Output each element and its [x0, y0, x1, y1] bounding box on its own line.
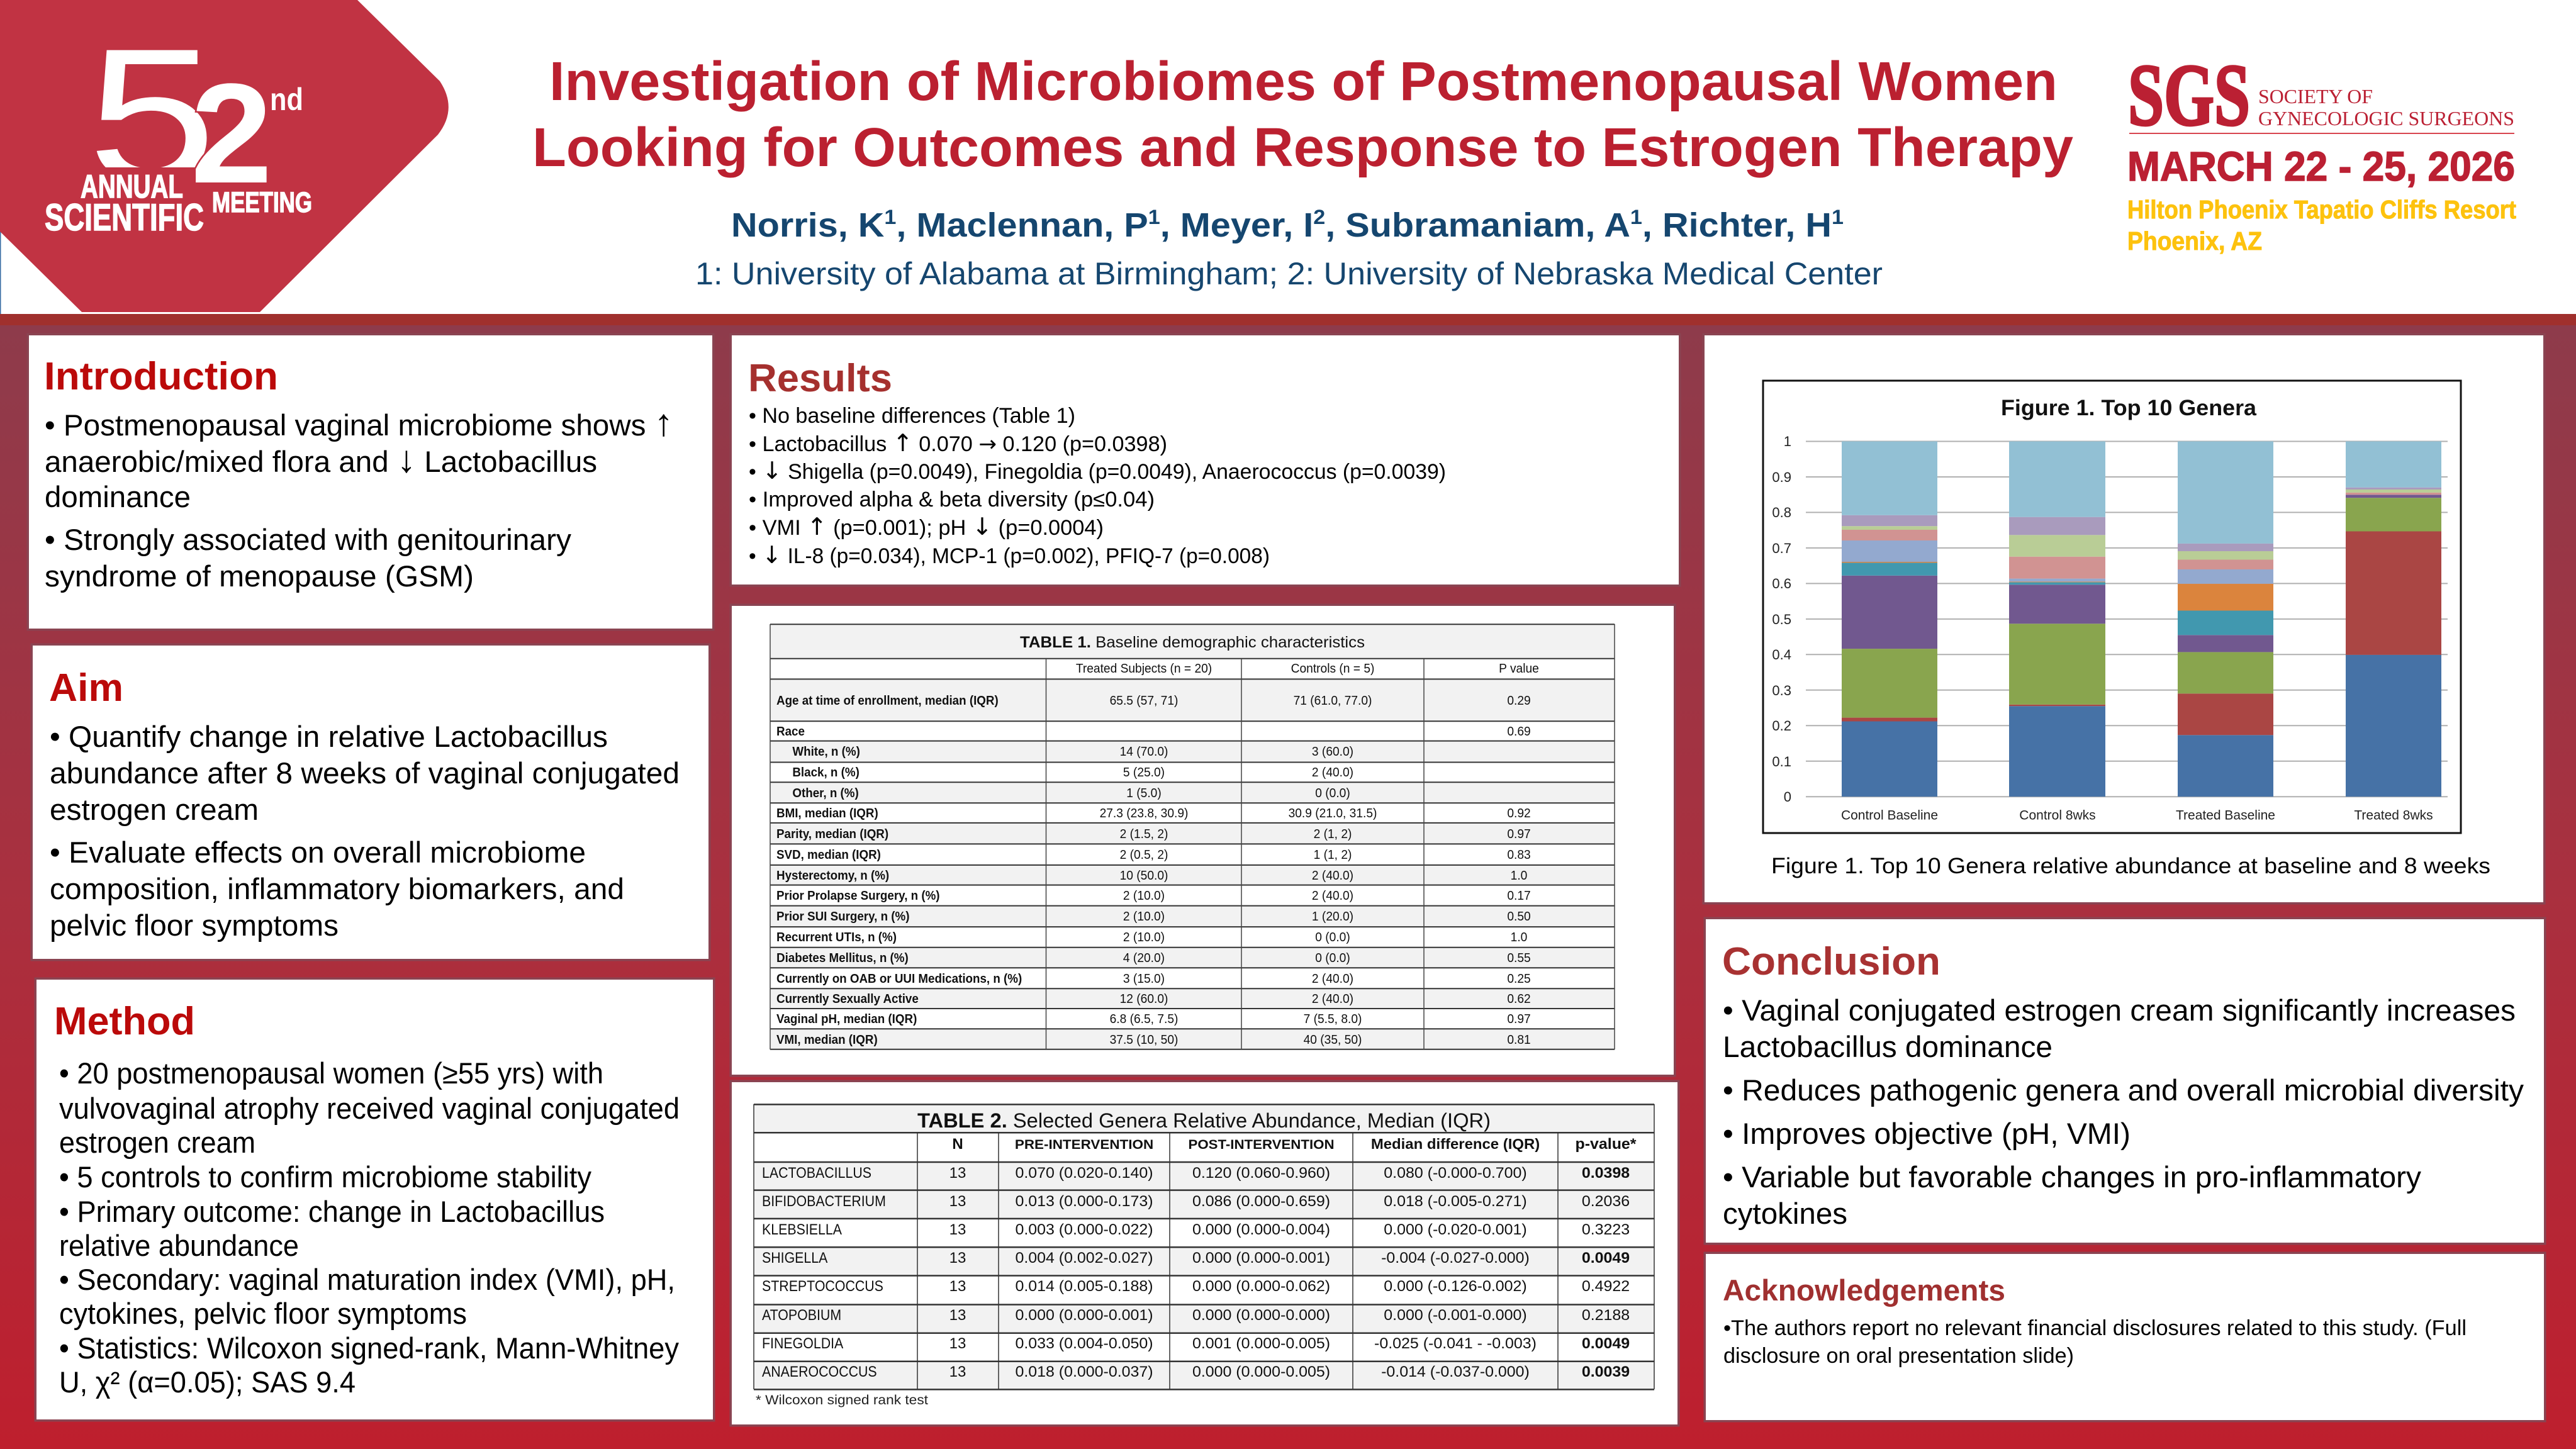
table 2 N column: 13: [949, 1250, 966, 1267]
figure caption: Figure 1. Top 10 Genera relative abundance at baseline and 8 weeks: [1771, 854, 2490, 878]
introduction text: syndrome of menopause (GSM): [45, 559, 474, 593]
y axis labels: 0.2: [1772, 718, 1791, 734]
table 2 pre-intervention column: 0.014 (0.005-0.188): [1015, 1278, 1153, 1295]
table 1 controls column: [1289, 662, 1377, 1047]
y axis labels: 0: [1784, 789, 1791, 805]
table 1 p value column: 0.17: [1507, 889, 1531, 903]
table 2 median difference column: Median difference (IQR): [1371, 1136, 1540, 1152]
method text: • Statistics: Wilcoxon signed-rank, Mann-Whitney: [59, 1331, 679, 1365]
table 1 controls column: 71 (61.0, 77.0): [1294, 694, 1372, 708]
city: Phoenix, AZ: [2127, 227, 2262, 255]
authors: , Maclennan, P: [896, 206, 1148, 244]
acknowledgements text: disclosure on oral presentation slide): [1723, 1344, 2074, 1368]
authors: 1: [1148, 206, 1160, 228]
table 2 pre-intervention column: [1015, 1136, 1153, 1380]
table 2 median difference column: 0.080 (-0.000-0.700): [1384, 1165, 1527, 1182]
table 2 post-intervention column: 0.120 (0.060-0.960): [1192, 1165, 1330, 1182]
table 1 p value column: 0.83: [1507, 848, 1531, 862]
results text: • No baseline differences (Table 1): [749, 404, 1075, 428]
method text: estrogen cream: [59, 1126, 255, 1159]
table 2 pre-intervention column: PRE-INTERVENTION: [1015, 1136, 1153, 1152]
table 2 N column: [949, 1136, 966, 1380]
authors: , Richter, H: [1642, 206, 1832, 244]
authors: 1: [1630, 206, 1642, 228]
heading: results: Results: [748, 357, 892, 400]
stacked bar chart: [1763, 381, 2461, 833]
table 2 genus labels: LACTOBACILLUS: [762, 1164, 871, 1181]
table 1 p value column: [1499, 662, 1539, 1047]
method text: U, χ² (α=0.05); SAS 9.4: [59, 1365, 356, 1399]
table 1 controls column: 1 (20.0): [1312, 910, 1353, 924]
table 2 p-value column: 0.2188: [1582, 1307, 1630, 1324]
table 2 post-intervention column: 0.000 (0.000-0.001): [1192, 1250, 1330, 1267]
results text: • ↓ IL-8 (p=0.034), MCP-1 (p=0.002), PFIQ-7 (p=0.008): [749, 541, 1270, 569]
table 2 genus labels: FINEGOLDIA: [762, 1334, 844, 1351]
table 1 controls column: 40 (35, 50): [1304, 1033, 1362, 1047]
title line 1: Investigation of Microbiomes of Postmenopausal Women: [549, 51, 2058, 112]
panel: figure 1: [1705, 335, 2543, 902]
heading: introduction: Introduction: [44, 355, 278, 398]
y axis labels: 0.5: [1772, 612, 1791, 627]
table 1 controls column: 0 (0.0): [1315, 786, 1350, 800]
heading: method: Method: [54, 1000, 195, 1043]
affiliations: 1: University of Alabama at Birmingham; 2: University of Nebraska Medical Center: [695, 256, 1883, 291]
table 2 N column: 13: [949, 1335, 966, 1352]
authors: 1: [884, 206, 896, 228]
y axis labels: 0.6: [1772, 576, 1791, 591]
table 1 treated column: 2 (10.0): [1123, 889, 1165, 903]
table 2 p-value column: [1575, 1136, 1637, 1380]
table 2 N column: 13: [949, 1165, 966, 1182]
panel: conclusion: [1706, 919, 2544, 1243]
table 1 controls column: 30.9 (21.0, 31.5): [1289, 807, 1377, 820]
table 1 row labels: Currently Sexually Active: [776, 992, 919, 1006]
table 2 footnote: * Wilcoxon signed rank test: [756, 1393, 928, 1407]
table 1 treated column: [1076, 662, 1212, 1047]
table 1 controls column: 7 (5.5, 8.0): [1304, 1012, 1362, 1026]
method text: vulvovaginal atrophy received vaginal conjugated: [59, 1092, 680, 1125]
table 1 controls column: 1 (1, 2): [1314, 848, 1352, 862]
table 1 p value column: 0.69: [1507, 725, 1531, 739]
logo numeral 2: 2: [191, 53, 272, 213]
table 1 controls column: 3 (60.0): [1312, 745, 1353, 759]
method text: • Primary outcome: change in Lactobacillus: [59, 1195, 605, 1228]
logo numeral 5: 5: [87, 9, 216, 220]
table 1 p value column: 0.25: [1507, 972, 1531, 986]
table 2 genus labels: STREPTOCOCCUS: [762, 1277, 883, 1294]
table 2 N column: 13: [949, 1363, 966, 1380]
table 2 median difference column: 0.000 (-0.020-0.001): [1384, 1221, 1527, 1238]
y axis labels: 1: [1784, 434, 1791, 449]
table 1 treated column: 12 (60.0): [1120, 992, 1168, 1006]
y axis labels: 0.7: [1772, 540, 1791, 556]
society name line 2: GYNECOLOGIC SURGEONS: [2258, 107, 2514, 130]
table 2 pre-intervention column: 0.018 (0.000-0.037): [1015, 1363, 1153, 1380]
table 2 pre-intervention column: 0.000 (0.000-0.001): [1015, 1307, 1153, 1324]
heading: aim: Aim: [49, 666, 123, 710]
authors: , Meyer, I: [1160, 206, 1313, 244]
table 1 p value column: 0.81: [1507, 1033, 1531, 1047]
table 2 row shading: [754, 1104, 1654, 1389]
aim text: estrogen cream: [50, 793, 259, 826]
table 1 row labels: Hysterectomy, n (%): [776, 868, 889, 883]
y axis labels: [1772, 434, 1791, 805]
table 1 p value column: 0.62: [1507, 992, 1531, 1006]
venue: Hilton Phoenix Tapatio Cliffs Resort: [2127, 195, 2516, 224]
table 2 post-intervention column: 0.086 (0.000-0.659): [1192, 1193, 1330, 1210]
table 1 controls column: 2 (40.0): [1312, 766, 1353, 780]
heading: conclusion: Conclusion: [1722, 940, 1940, 983]
table 2 median difference column: -0.004 (-0.027-0.000): [1381, 1250, 1530, 1267]
table 1 row labels: Other, n (%): [792, 786, 859, 800]
table 1 row labels: Prior Prolapse Surgery, n (%): [776, 888, 940, 903]
introduction text: • Postmenopausal vaginal microbiome shows ↑: [45, 401, 673, 444]
table 1 treated column: Treated Subjects (n = 20): [1076, 662, 1212, 676]
title block: [532, 51, 2073, 291]
table 1 p value column: 0.55: [1507, 951, 1531, 965]
table 1 treated column: 2 (10.0): [1123, 910, 1165, 924]
authors: 2: [1313, 206, 1325, 228]
table 1 row labels: Age at time of enrollment, median (IQR): [776, 693, 999, 708]
table 1 p value column: 0.29: [1507, 694, 1531, 708]
table 1 row labels: Vaginal pH, median (IQR): [776, 1012, 917, 1026]
table 2 post-intervention column: POST-INTERVENTION: [1188, 1136, 1335, 1152]
table 2 median difference column: 0.000 (-0.126-0.002): [1384, 1278, 1527, 1295]
table 1 p value column: 0.97: [1507, 827, 1531, 841]
chart title: Figure 1. Top 10 Genera: [2001, 396, 2257, 420]
table 1 treated column: 3 (15.0): [1123, 972, 1165, 986]
table 2 genus labels: BIFIDOBACTERIUM: [762, 1192, 886, 1209]
table 1 title: TABLE 1. Baseline demographic characteristics: [1020, 634, 1365, 651]
logo hexagon badge: [0, 0, 449, 312]
table 2 p-value column: 0.2036: [1582, 1193, 1630, 1210]
table 2 genus labels: [762, 1164, 886, 1380]
bar: control baseline: [1842, 442, 1937, 797]
table 1 p value column: 0.97: [1507, 1012, 1531, 1026]
table 2 median difference column: -0.014 (-0.037-0.000): [1381, 1363, 1530, 1380]
introduction text: anaerobic/mixed flora and ↓ Lactobacillus: [45, 438, 597, 480]
panel: method: [36, 980, 713, 1419]
table 2 median difference column: 0.000 (-0.001-0.000): [1384, 1307, 1527, 1324]
logo ordinal nd: nd: [270, 82, 303, 117]
conclusion text: • Vaginal conjugated estrogen cream significantly increases: [1723, 993, 2516, 1027]
table 2 post-intervention column: [1188, 1136, 1335, 1380]
SGS monogram: SGS: [2128, 47, 2250, 144]
table 1 controls column: 0 (0.0): [1315, 931, 1350, 944]
logo SCIENTIFIC: SCIENTIFIC: [45, 196, 204, 238]
table 1 p value column: 1.0: [1511, 931, 1527, 944]
table 2 post-intervention column: 0.000 (0.000-0.005): [1192, 1363, 1330, 1380]
table 1 treated column: 2 (10.0): [1123, 931, 1165, 944]
x axis labels: Control 8wks: [2019, 808, 2096, 823]
table 1 controls column: 2 (40.0): [1312, 889, 1353, 903]
table 1 treated column: 65.5 (57, 71): [1110, 694, 1178, 708]
table 2 genus labels: ANAEROCOCCUS: [762, 1363, 877, 1380]
table 2 p-value column: 0.0039: [1582, 1363, 1630, 1380]
aim text: [50, 720, 680, 942]
authors: , Subramaniam, A: [1325, 206, 1630, 244]
table 2 p-value column: p-value*: [1575, 1136, 1637, 1153]
panel: acknowledgements: [1706, 1254, 2544, 1420]
table 1 treated column: 10 (50.0): [1120, 869, 1168, 883]
table 2 pre-intervention column: 0.033 (0.004-0.050): [1015, 1335, 1153, 1352]
conclusion text: [1723, 993, 2524, 1230]
y axis labels: 0.9: [1772, 469, 1791, 485]
table 1 treated column: 6.8 (6.5, 7.5): [1110, 1012, 1178, 1026]
meeting dates: MARCH 22 - 25, 2026: [2127, 143, 2515, 189]
method text: cytokines, pelvic floor symptoms: [59, 1297, 467, 1330]
table 1 p value column: 0.50: [1507, 910, 1531, 924]
table 1 row labels: Race: [776, 724, 805, 739]
table 2 p-value column: 0.3223: [1582, 1221, 1630, 1238]
table 1 treated column: 14 (70.0): [1120, 745, 1168, 759]
table 1 row labels: Black, n (%): [792, 765, 860, 780]
table 1 row labels: [776, 693, 1022, 1047]
table 1 treated column: 5 (25.0): [1123, 766, 1165, 780]
table 2 N column: 13: [949, 1221, 966, 1238]
aim text: • Evaluate effects on overall microbiome: [50, 836, 586, 869]
y axis labels: 0.3: [1772, 683, 1791, 698]
panel: aim: [33, 646, 708, 959]
logo ANNUAL: ANNUAL: [81, 169, 183, 205]
table 2 genus labels: SHIGELLA: [762, 1249, 828, 1266]
authors: Norris, K: [731, 206, 875, 244]
conclusion text: • Improves objective (pH, VMI): [1723, 1117, 2131, 1150]
table 2 median difference column: 0.018 (-0.005-0.271): [1384, 1193, 1527, 1210]
table 1 treated column: 1 (5.0): [1126, 786, 1162, 800]
title line 2: Looking for Outcomes and Response to Estrogen Therapy: [532, 117, 2073, 178]
introduction text: • Strongly associated with genitourinary: [45, 523, 572, 556]
table 1 treated column: 4 (20.0): [1123, 951, 1165, 965]
x axis labels: Treated 8wks: [2354, 808, 2433, 823]
results text: • VMI ↑ (p=0.001); pH ↓ (p=0.0004): [749, 513, 1104, 540]
y axis labels: 0.1: [1772, 754, 1791, 769]
table 1 controls column: 2 (40.0): [1312, 992, 1353, 1006]
table 1 controls column: Controls (n = 5): [1291, 662, 1374, 676]
conclusion text: • Reduces pathogenic genera and overall microbial diversity: [1723, 1073, 2524, 1107]
table 2 N column: 13: [949, 1278, 966, 1295]
acknowledgements text: [1723, 1316, 2467, 1368]
table 1 row shading: [770, 624, 1615, 1049]
aim text: abundance after 8 weeks of vaginal conjugated: [50, 756, 680, 790]
acknowledgements text: •The authors report no relevant financial disclosures related to this study. (Full: [1723, 1316, 2467, 1340]
method text: • 5 controls to confirm microbiome stability: [59, 1160, 591, 1194]
table 1 row labels: BMI, median (IQR): [776, 806, 878, 820]
table 1 treated column: 27.3 (23.8, 30.9): [1100, 807, 1188, 820]
method text: relative abundance: [59, 1229, 299, 1262]
conclusion text: cytokines: [1723, 1197, 1847, 1230]
table 2 post-intervention column: 0.000 (0.000-0.062): [1192, 1278, 1330, 1295]
bar: control 8wks: [2009, 442, 2105, 797]
introduction text: dominance: [45, 480, 191, 513]
table 1 controls column: 2 (40.0): [1312, 869, 1353, 883]
method text: [59, 1056, 680, 1399]
conclusion text: Lactobacillus dominance: [1723, 1030, 2052, 1063]
table 2 pre-intervention column: 0.004 (0.002-0.027): [1015, 1250, 1153, 1267]
table 2 median difference column: -0.025 (-0.041 - -0.003): [1374, 1335, 1537, 1352]
aim text: • Quantify change in relative Lactobacillus: [50, 720, 608, 753]
table 1 row labels: SVD, median (IQR): [776, 848, 881, 862]
table 1 row labels: Prior SUI Surgery, n (%): [776, 909, 910, 924]
table 2 post-intervention column: 0.000 (0.000-0.004): [1192, 1221, 1330, 1238]
authors: 1: [1832, 206, 1844, 228]
table 2 p-value column: 0.4922: [1582, 1278, 1630, 1295]
results text: • Lactobacillus ↑ 0.070 → 0.120 (p=0.0398): [749, 429, 1167, 457]
table 2 N column: N: [952, 1136, 963, 1153]
table 1 treated column: 2 (1.5, 2): [1120, 827, 1168, 841]
x axis labels: Control Baseline: [1841, 808, 1938, 823]
bar: treated 8wks: [2346, 442, 2441, 797]
y axis labels: 0.8: [1772, 505, 1791, 520]
logo MEETING: MEETING: [212, 186, 312, 218]
table 1 p value column: P value: [1499, 662, 1539, 676]
x axis labels: Treated Baseline: [2176, 808, 2275, 823]
table 1 row labels: Diabetes Mellitus, n (%): [776, 951, 909, 965]
SGS society logo and meeting details: [2127, 47, 2516, 255]
table 1 row labels: White, n (%): [792, 744, 860, 759]
table 2 genus labels: KLEBSIELLA: [762, 1221, 843, 1238]
results text: [749, 404, 1446, 569]
table 2 pre-intervention column: 0.003 (0.000-0.022): [1015, 1221, 1153, 1238]
table 2 p-value column: 0.0049: [1582, 1250, 1630, 1267]
table 1 controls column: 2 (1, 2): [1314, 827, 1352, 841]
table 1 treated column: 37.5 (10, 50): [1110, 1033, 1178, 1047]
table 1 row labels: Recurrent UTIs, n (%): [776, 930, 897, 944]
table 2 median difference column: [1371, 1136, 1540, 1380]
table 2 pre-intervention column: 0.013 (0.000-0.173): [1015, 1193, 1153, 1210]
table 1 row labels: Parity, median (IQR): [776, 827, 888, 841]
y axis labels: 0.4: [1772, 647, 1791, 663]
logo: 52nd annual scientific meeting badge: [0, 0, 449, 312]
table 2 title: TABLE 2. Selected Genera Relative Abundance, Median (IQR): [917, 1109, 1491, 1132]
table 2 p-value column: 0.0398: [1582, 1165, 1630, 1182]
results text: • ↓ Shigella (p=0.0049), Finegoldia (p=0.0049), Anaerococcus (p=0.0039): [749, 457, 1446, 484]
table 2 pre-intervention column: 0.070 (0.020-0.140): [1015, 1165, 1153, 1182]
method text: • 20 postmenopausal women (≥55 yrs) with: [59, 1056, 603, 1090]
x axis labels: [1841, 808, 2433, 823]
table 2 N column: 13: [949, 1193, 966, 1210]
table 1 controls column: 0 (0.0): [1315, 951, 1350, 965]
panel: table 1 baseline demographics: [732, 606, 1674, 1075]
panel: table 2 selected genera relative abundance: [732, 1082, 1677, 1424]
table 1 p value column: 0.92: [1507, 807, 1531, 820]
table 2 post-intervention column: 0.001 (0.000-0.005): [1192, 1335, 1330, 1352]
conclusion text: • Variable but favorable changes in pro-inflammatory: [1723, 1160, 2422, 1194]
aim text: pelvic floor symptoms: [50, 909, 339, 942]
method text: • Secondary: vaginal maturation index (VMI), pH,: [59, 1263, 675, 1296]
bar: treated baseline: [2178, 442, 2273, 797]
introduction text: [45, 401, 673, 593]
table 1 p value column: 1.0: [1511, 869, 1527, 883]
table 2 post-intervention column: 0.000 (0.000-0.000): [1192, 1307, 1330, 1324]
aim text: composition, inflammatory biomarkers, and: [50, 872, 624, 905]
table 1 row labels: VMI, median (IQR): [776, 1032, 878, 1047]
table 2 N column: 13: [949, 1307, 966, 1324]
panel: results: [732, 335, 1679, 585]
heading: acknowledgements: Acknowledgements: [1723, 1273, 2005, 1307]
results text: • Improved alpha & beta diversity (p≤0.04): [749, 488, 1155, 512]
table 1 row labels: Currently on OAB or UUI Medications, n (%): [776, 971, 1022, 986]
table 1 treated column: 2 (0.5, 2): [1120, 848, 1168, 862]
table 1 controls column: 2 (40.0): [1312, 972, 1353, 986]
table 2 genus labels: ATOPOBIUM: [762, 1306, 841, 1323]
panel: introduction: [29, 335, 712, 629]
society name line 1: SOCIETY OF: [2258, 85, 2373, 108]
table 2 p-value column: 0.0049: [1582, 1335, 1630, 1352]
